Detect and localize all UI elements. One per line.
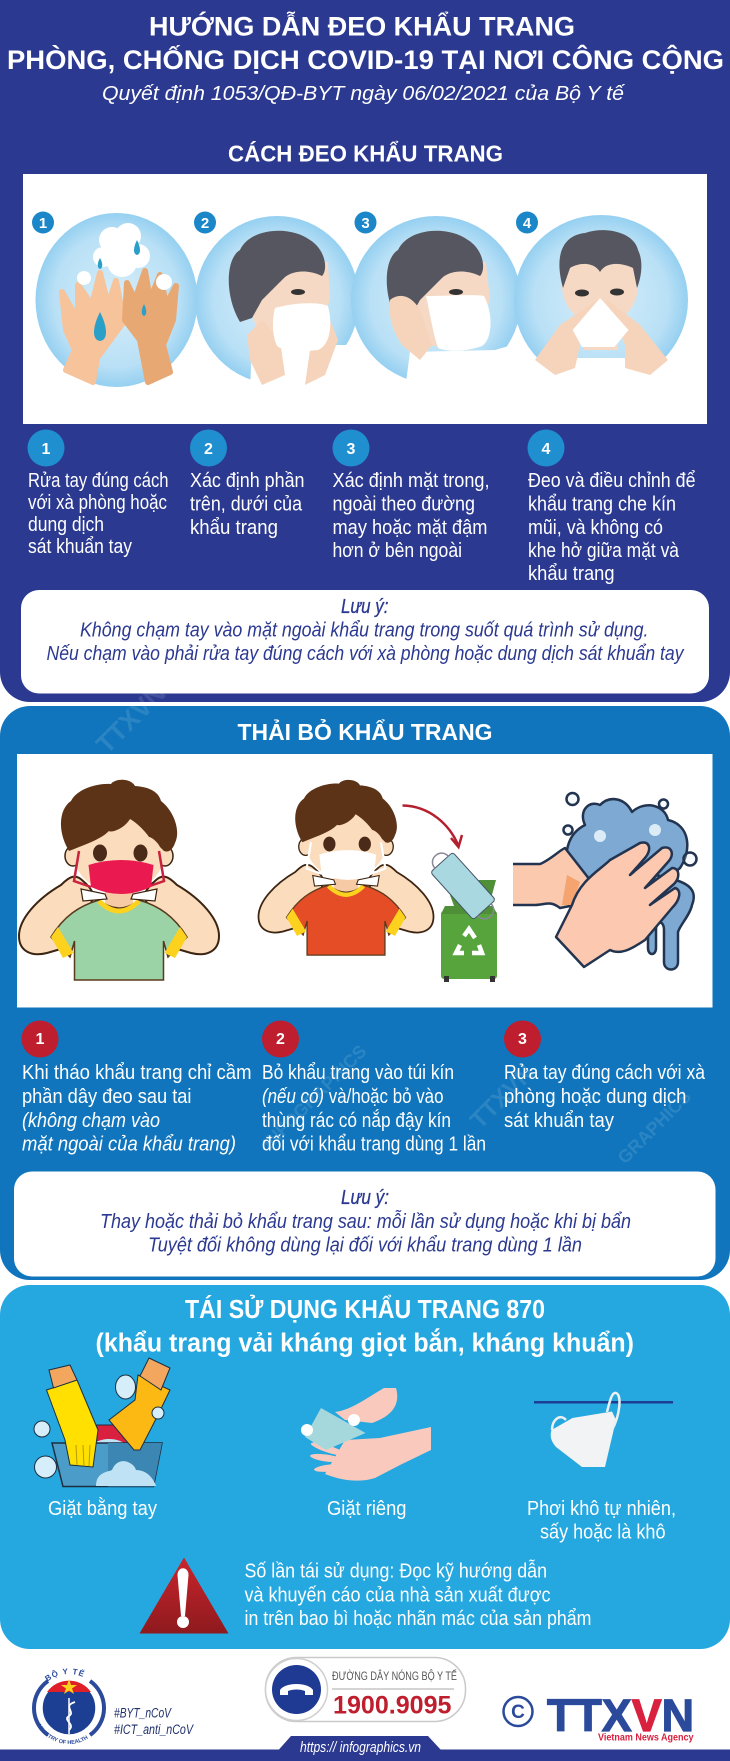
- step illustration 2: identifying mask sides: [194, 212, 359, 395]
- labels: three washing methods: Phơi khô tự nhiên,: [527, 1498, 676, 1520]
- step illustration 4: adjusting the mask: 4: [523, 215, 532, 232]
- step 2 text: trên, dưới của: [190, 494, 303, 516]
- labels: three washing methods: sấy hoặc là khô: [540, 1522, 666, 1544]
- hotline badge: 1900.9095: [333, 1692, 452, 1720]
- logo: TTXVN: C: [511, 1702, 525, 1723]
- labels: three washing methods: Giặt riêng: [327, 1498, 406, 1520]
- disposal badges: 3: [518, 1031, 527, 1048]
- step 1 text: sát khuẩn tay: [28, 536, 132, 558]
- labels: three washing methods: Giặt bằng tay: [48, 1497, 157, 1520]
- step 1 text: [28, 470, 168, 558]
- logo: Ministry of Health: BỘ Y TẾ: [44, 1668, 85, 1682]
- warning text: [244, 1560, 592, 1630]
- watermarks: INFOGRAPHICS: [259, 1041, 370, 1153]
- disposal step 2 text: (nếu có) và/hoặc bỏ vào: [262, 1085, 444, 1108]
- disposal step 1 text: phần dây đeo sau tai: [22, 1085, 192, 1108]
- hashtags: [114, 1706, 195, 1737]
- step 1 text: với xà phòng hoặc: [28, 492, 167, 514]
- footer bar with website: [0, 1736, 730, 1761]
- watermarks: [90, 678, 695, 1168]
- step 1 text: Rửa tay đúng cách: [28, 470, 168, 492]
- disposal step 3 text: sát khuẩn tay: [504, 1109, 615, 1132]
- disposal step 1 text: mặt ngoài của khẩu trang): [22, 1132, 236, 1156]
- step 3 text: ngoài theo đường: [332, 494, 475, 516]
- heading: disposal: THẢI BỎ KHẨU TRANG: [238, 717, 492, 745]
- step illustration 2: identifying mask sides: 2: [201, 215, 209, 232]
- panel: how to wear a mask: [0, 0, 730, 702]
- note box: disposal: Lưu ý:: [341, 1187, 389, 1209]
- logo: Ministry of Health: MINISTRY OF HEALTH: [40, 1724, 88, 1744]
- arrow: into bin: [402, 806, 462, 847]
- hashtags: #BYT_nCoV: [114, 1706, 173, 1720]
- step illustration 3: checking inside and outside: [351, 212, 521, 395]
- step 2 text: Xác định phần: [190, 470, 304, 492]
- step badges: 2: [204, 441, 213, 458]
- logo: Ministry of Health: [32, 1668, 106, 1744]
- heading: how to wear: CÁCH ĐEO KHẨU TRANG: [228, 140, 503, 166]
- step 4 text: [528, 470, 696, 585]
- step illustration 1: washing hands: 1: [39, 215, 47, 232]
- step 2 text: khẩu trang: [190, 517, 278, 539]
- step illustration 4: adjusting the mask: [514, 212, 688, 395]
- disposal step 3 text: [504, 1061, 706, 1132]
- disposal step 3 text: phòng hoặc dung dịch: [504, 1085, 686, 1108]
- disposal badges: 1: [36, 1031, 45, 1048]
- disposal badges: 2: [276, 1031, 285, 1048]
- heading: reuse: TÁI SỬ DỤNG KHẨU TRANG 870: [185, 1294, 545, 1324]
- warning text: và khuyến cáo của nhà sản xuất được: [244, 1584, 550, 1606]
- icon: mask drying on a line: [534, 1393, 673, 1467]
- icon: washing hands with foam: [513, 793, 696, 970]
- step badges: 3: [347, 441, 356, 458]
- image panel: disposal steps: [17, 754, 712, 1008]
- step badges: 1: [42, 441, 51, 458]
- heading: reuse: [96, 1294, 634, 1358]
- step 3 text: hơn ở bên ngoài: [332, 540, 462, 562]
- note box: disposal: Tuyệt đối không dùng lại đối với khẩu trang dùng 1 lần: [148, 1234, 582, 1256]
- disposal badges: [22, 1020, 541, 1058]
- heading: reuse: (khẩu trang vải kháng giọt bắn, kháng khuẩn): [96, 1328, 634, 1358]
- hotline badge: [266, 1658, 466, 1722]
- footer bar with website: https:// infographics.vn: [300, 1740, 421, 1756]
- disposal step 2 text: thùng rác có nắp đậy kín: [262, 1109, 451, 1132]
- main title: [7, 10, 724, 75]
- warning text: Số lần tái sử dụng: Đọc kỹ hướng dẫn: [244, 1560, 547, 1582]
- note box: wearing: Không chạm tay vào mặt ngoài khẩu trang trong suốt quá trình sử dụng.: [80, 620, 648, 642]
- step 4 text: mũi, và không có: [528, 517, 663, 539]
- main title: HƯỚNG DẪN ĐEO KHẨU TRANG: [149, 10, 575, 42]
- main title: PHÒNG, CHỐNG DỊCH COVID-19 TẠI NƠI CÔNG CỘNG: [7, 43, 724, 75]
- logo: TTXVN: TTXVN: [547, 1690, 694, 1741]
- panel: mask disposal: [0, 678, 730, 1280]
- labels: three washing methods: [48, 1497, 676, 1544]
- disposal step 1 text: [22, 1061, 252, 1156]
- illustration: child with red mask: [19, 780, 219, 980]
- step 3 text: [332, 470, 490, 562]
- hashtags: #ICT_anti_nCoV: [114, 1722, 195, 1737]
- disposal step 2 text: [262, 1061, 486, 1156]
- warning text: in trên bao bì hoặc nhãn mác của sản phẩm: [244, 1608, 592, 1630]
- step illustration 3: checking inside and outside: 3: [361, 215, 370, 232]
- hotline badge: ĐƯỜNG DÂY NÓNG BỘ Y TẾ: [332, 1670, 457, 1683]
- note box: wearing: Lưu ý:: [341, 596, 388, 618]
- watermarks: TTXVN: [90, 678, 172, 759]
- step badges: 4: [542, 441, 551, 458]
- step 4 text: khẩu trang: [528, 563, 614, 585]
- icon: warning triangle: [140, 1558, 228, 1634]
- note box: disposal: [14, 1172, 716, 1276]
- disposal step 1 text: (không chạm vào: [22, 1109, 160, 1132]
- step 3 text: may hoặc mặt đậm: [332, 517, 488, 539]
- note box: disposal: Thay hoặc thải bỏ khẩu trang sau: mỗi lần sử dụng hoặc khi bị bẩn: [100, 1210, 631, 1233]
- logo: TTXVN: Vietnam News Agency: [598, 1732, 694, 1744]
- step 3 text: Xác định mặt trong,: [332, 470, 490, 492]
- watermarks: TTXVN: [465, 1060, 540, 1134]
- step illustration 1: washing hands: [32, 212, 198, 387]
- disposal step 1 text: Khi tháo khẩu trang chỉ cầm: [22, 1061, 252, 1084]
- step 2 text: [190, 470, 304, 539]
- subtitle: Quyết định 1053/QĐ-BYT ngày 06/02/2021 của Bộ Y tế: [102, 82, 626, 105]
- watermarks: GRAPHICS: [614, 1087, 695, 1168]
- step 4 text: Đeo và điều chỉnh để: [528, 470, 696, 492]
- icon: hand washing in a basin: [34, 1358, 170, 1486]
- step 1 text: dung dịch: [28, 514, 104, 536]
- disposal step 2 text: đối với khẩu trang dùng 1 lần: [262, 1132, 486, 1156]
- step 4 text: khẩu trang che kín: [528, 494, 676, 516]
- step badges: [28, 430, 564, 466]
- illustration: child with white mask: [258, 780, 434, 955]
- image panel: four wearing steps: [23, 174, 707, 424]
- icon: washing separately: [301, 1388, 431, 1481]
- icon: recycling bin with discarded mask: [424, 845, 502, 982]
- disposal step 2 text: Bỏ khẩu trang vào túi kín: [262, 1061, 454, 1084]
- note box: wearing: [21, 590, 709, 694]
- step 4 text: khe hở giữa mặt và: [528, 540, 680, 562]
- panel: reusing mask 870: [0, 1285, 730, 1649]
